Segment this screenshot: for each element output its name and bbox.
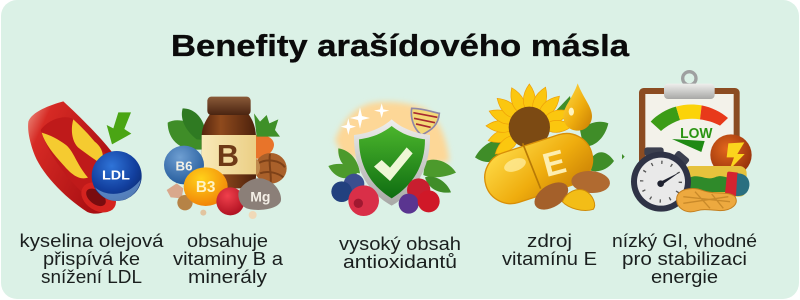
caption: vitamins: minerály [188,266,268,287]
caption: antioxidants: antioxidantů [343,251,457,272]
Mg rock [238,178,281,210]
lightning ball [710,134,752,176]
caption: vitamins: obsahuje [187,230,268,251]
jar label [202,135,256,174]
icon: vitamin B jar [164,97,287,219]
small leaf fragment [622,154,625,159]
icon: artery with LDL: LDL [102,167,130,182]
caption: low GI: energie [651,266,718,287]
caption: vitamins [173,230,284,287]
red ball [216,187,244,215]
icon: artery with LDL [28,101,142,219]
oil drop [563,83,592,131]
clipboard board [639,88,740,178]
right leaves [423,160,456,177]
icon: vitamin B jar: B3 [196,179,215,196]
caption: vitamin E: vitamínu E [502,248,597,269]
artery opening [76,176,122,219]
sparkles [341,103,389,135]
needle [672,139,705,152]
icon: low glycemic index clipboard [622,72,752,212]
glow cloud [335,102,449,165]
caption: LDL [20,230,164,287]
almonds [530,177,573,215]
berries [344,174,364,194]
caption: LDL: snížení LDL [41,266,142,287]
plaque deposits [42,133,88,178]
carrot [253,135,274,159]
LOW label: LOW [680,126,713,142]
caption: vitamins: vitaminy B a [173,248,284,269]
icon: vitamin B jar: B6 [175,159,193,174]
jar lid [207,97,251,115]
LDL sphere [92,151,142,201]
icon: vitamin B jar: Mg [250,189,270,205]
icon: antioxidant shield [328,102,456,216]
left leaves [338,148,360,173]
B6 ball [164,146,204,184]
icon: vitamin E capsule [475,83,614,215]
stopwatch [644,147,664,156]
leaves [168,120,204,150]
walnut [255,153,287,184]
jar body [202,112,256,188]
DNA strand [411,108,439,135]
sunflower petals [486,84,573,159]
caption: vitamin E [502,230,597,269]
peanut [677,189,736,212]
small rocks [167,183,183,198]
artery wall [28,101,115,214]
caption: LDL: kyselina olejová [20,230,164,251]
gauge [651,107,680,131]
arrow down [107,112,131,144]
caption: antioxidants [339,233,461,272]
caption: low GI: nízký GI, vhodné [612,230,757,251]
icon: vitamin B jar: B [217,139,239,173]
leaves [475,138,507,162]
clip [683,72,696,85]
caption: vitamin E: zdroj [527,230,572,251]
artery lumen [41,117,110,193]
caption: LDL: přispívá ke [43,248,140,269]
capsule [478,127,599,210]
caption: low GI: pro stabilizaci [622,248,747,269]
caption: low GI [612,230,757,287]
energy bar [683,166,747,197]
check mark [374,147,413,181]
capsule letter: E [539,143,570,185]
sunflower centre [509,107,550,148]
title: Benefity arašídového másla [171,28,630,63]
B3 ball [184,167,228,206]
caption: antioxidants: vysoký obsah [339,233,461,254]
shield [354,119,430,206]
